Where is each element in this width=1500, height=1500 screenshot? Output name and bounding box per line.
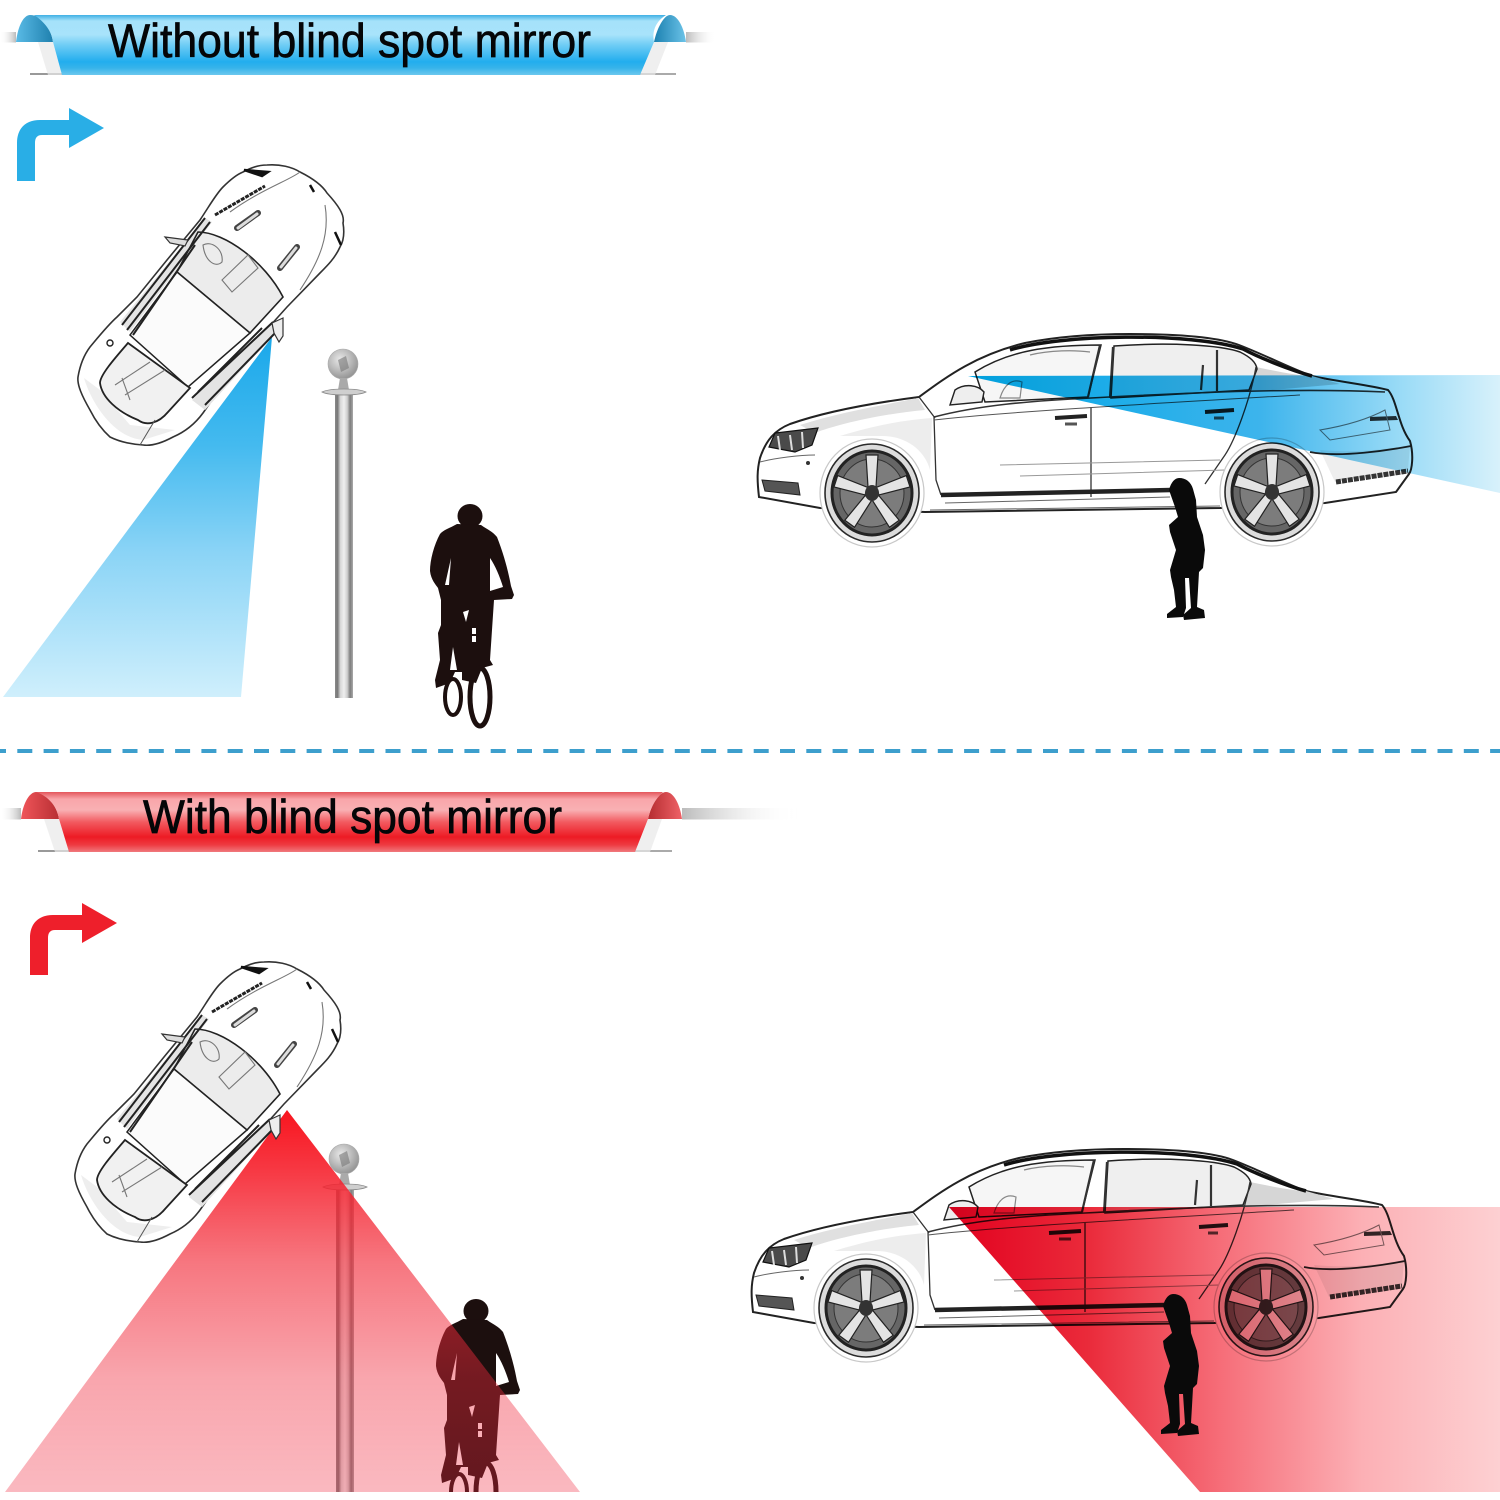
silhouette: pedestrian (1161, 1294, 1199, 1436)
banner: without blind spot mirror (0, 14, 716, 75)
red vision cone: top view (5, 1110, 580, 1492)
blue vision wedge: side view (968, 375, 1500, 493)
car: side view (752, 1149, 1406, 1362)
car: side view (758, 334, 1412, 547)
red vision wedge: side view (949, 1207, 1500, 1492)
icon: red turn arrow (30, 903, 117, 975)
heading: with blind spot mirror: With blind spot mirror (143, 790, 562, 843)
icon: blue turn arrow (17, 108, 104, 181)
icon: pole (323, 1144, 367, 1493)
panel: without blind spot mirror (0, 14, 1500, 726)
silhouette: cyclist (430, 504, 514, 726)
divider: dashed line (0, 749, 1500, 753)
car: top view (75, 962, 341, 1242)
banner: with blind spot mirror (0, 790, 797, 852)
car: top view (78, 165, 344, 445)
silhouette: pedestrian (1167, 478, 1205, 620)
panel: with blind spot mirror (0, 790, 1500, 1500)
icon: pole (322, 349, 366, 698)
heading: without blind spot mirror: Without blind spot mirror (108, 14, 591, 67)
silhouette: cyclist (436, 1299, 520, 1500)
blue vision cone: top view (3, 337, 272, 697)
